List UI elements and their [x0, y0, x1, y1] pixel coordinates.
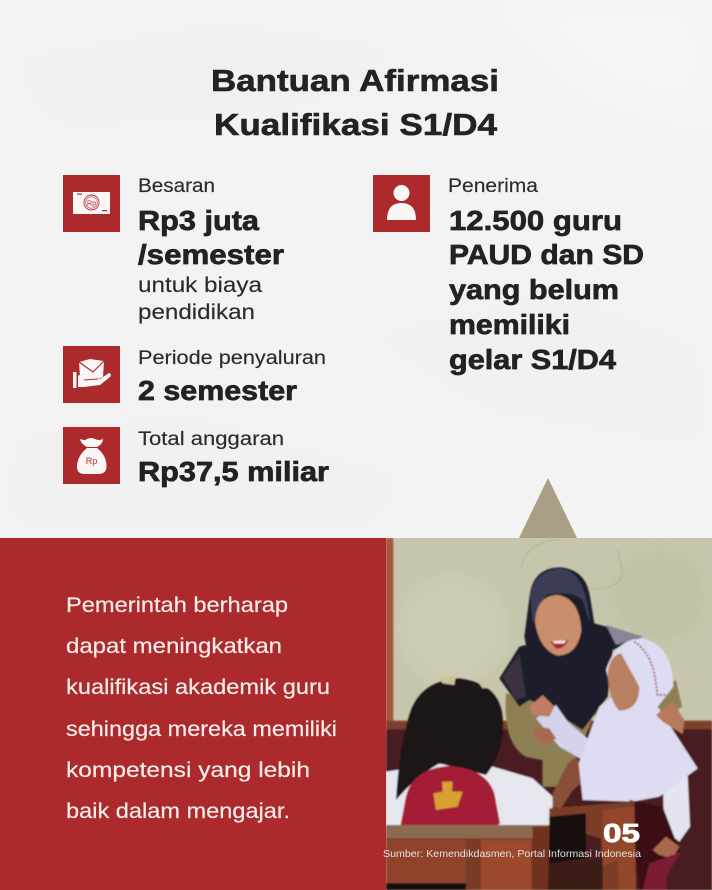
desks	[549, 802, 636, 890]
source note: Sumber: Kemendikdasmen, Portal Informasi Indonesia	[383, 848, 641, 860]
text: periode	[138, 348, 326, 406]
text: periode: 2 semester	[138, 375, 297, 406]
statement text: dapat meningkatkan	[66, 635, 282, 658]
panel: red statement	[0, 538, 387, 890]
girl shirt and sleeve	[663, 775, 690, 842]
text: penerima: PAUD dan SD	[449, 239, 644, 270]
text: penerima: memiliki	[449, 309, 570, 340]
text: besaran: Besaran	[138, 176, 215, 197]
text: total: Rp37,5 miliar	[138, 456, 329, 487]
text: besaran	[138, 176, 284, 324]
icon: person	[373, 175, 430, 232]
text: penerima: Penerima	[448, 176, 538, 197]
text: penerima: yang belum	[449, 274, 619, 305]
hands	[529, 695, 554, 717]
seated pupil	[386, 763, 553, 825]
icon: money bag: Rp	[86, 456, 97, 466]
statement text	[66, 594, 337, 823]
text: besaran: untuk biaya	[138, 274, 262, 297]
panel: besaran	[63, 175, 284, 324]
icon: money bag	[63, 427, 120, 484]
text: penerima: gelar S1/D4	[449, 344, 616, 375]
triangle pointer	[519, 478, 577, 538]
title	[211, 63, 499, 142]
text: penerima	[448, 176, 644, 375]
text: total: Total anggaran	[138, 429, 284, 450]
skirt	[629, 800, 683, 890]
paper background	[0, 0, 712, 538]
panel: total anggaran	[63, 427, 329, 487]
text: besaran: pendidikan	[138, 301, 255, 324]
photo: teacher and pupils in classroom	[386, 538, 712, 890]
panel: periode penyaluran	[63, 346, 326, 406]
teacher body	[506, 680, 682, 787]
text: besaran: Rp3 juta	[138, 205, 259, 236]
text: penerima: 12.500 guru	[449, 205, 622, 236]
statement text: kualifikasi akademik guru	[66, 676, 330, 699]
text: besaran: /semester	[138, 239, 284, 270]
statement text: kompetensi yang lebih	[66, 759, 310, 782]
red cap	[399, 766, 500, 834]
title: Bantuan Afirmasi	[211, 63, 499, 98]
icon: banknote: Rp	[87, 200, 96, 208]
hijab	[499, 567, 643, 730]
icon: hand with envelope	[63, 346, 120, 403]
icon: banknote	[63, 175, 120, 232]
statement text: sehingga mereka memiliki	[66, 718, 337, 741]
text: total	[138, 429, 329, 487]
title: Kualifikasi S1/D4	[214, 107, 498, 142]
text: periode: Periode penyaluran	[138, 348, 326, 369]
girl white hijab	[579, 638, 698, 802]
page number: 05	[603, 818, 640, 848]
statement text: Pemerintah berharap	[66, 594, 288, 617]
face	[535, 595, 581, 656]
statement text: baik dalam mengajar.	[66, 800, 290, 823]
panel: penerima	[373, 175, 644, 375]
